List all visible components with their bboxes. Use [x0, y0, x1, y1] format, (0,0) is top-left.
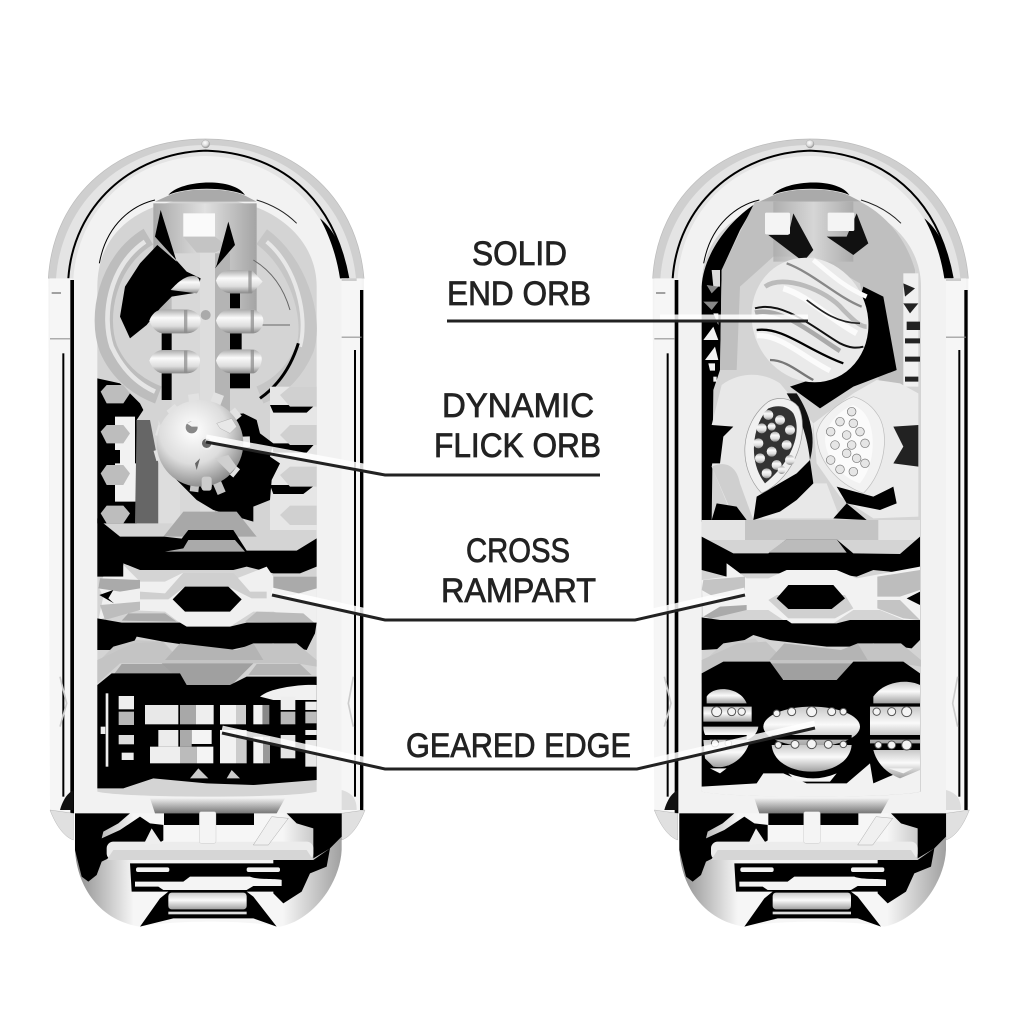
label: dynamic flick orb: DYNAMIC	[442, 387, 594, 425]
label: geared edge: GEARED EDGE	[406, 727, 631, 765]
black cavity shapes	[120, 210, 250, 400]
dynamic flick orb	[155, 394, 250, 493]
leader: solid end orb	[447, 320, 808, 322]
outer shell	[653, 139, 969, 840]
cross rampart	[702, 520, 920, 663]
end cap	[75, 812, 342, 927]
cross rampart	[97, 512, 317, 660]
leaf with nubs, right	[817, 397, 884, 493]
label: dynamic flick orb: FLICK ORB	[434, 427, 601, 465]
leader: geared edge	[222, 728, 815, 769]
geared balls	[702, 662, 920, 797]
side pegs and black stairs	[97, 378, 317, 530]
orb ring	[104, 237, 308, 398]
outer shell	[48, 139, 365, 840]
lower rampart	[97, 642, 317, 685]
leaf with nubs, left	[745, 398, 802, 493]
label: solid end orb: SOLID	[472, 235, 567, 273]
central column	[153, 203, 257, 530]
label: dynamic flick orb	[434, 387, 601, 465]
nubs	[149, 270, 263, 373]
lower rampart	[702, 642, 921, 685]
leader: dynamic flick orb	[206, 442, 600, 475]
upper chamber shading	[702, 202, 920, 522]
geared edge	[97, 673, 317, 788]
label: cross rampart: RAMPART	[441, 572, 596, 610]
label: cross rampart: CROSS	[466, 532, 570, 570]
label: cross rampart	[441, 532, 596, 610]
lobes behind leaves	[712, 375, 918, 520]
end cap	[679, 812, 946, 927]
device: solid end orb side	[653, 139, 969, 927]
label: solid end orb: END ORB	[447, 275, 591, 313]
label: solid end orb	[447, 235, 591, 313]
solid end orb	[731, 238, 889, 402]
leader: cross rampart	[272, 595, 745, 620]
leader line halos	[206, 318, 815, 765]
gear shadow	[173, 413, 280, 522]
device: dynamic flick orb side	[48, 139, 365, 927]
